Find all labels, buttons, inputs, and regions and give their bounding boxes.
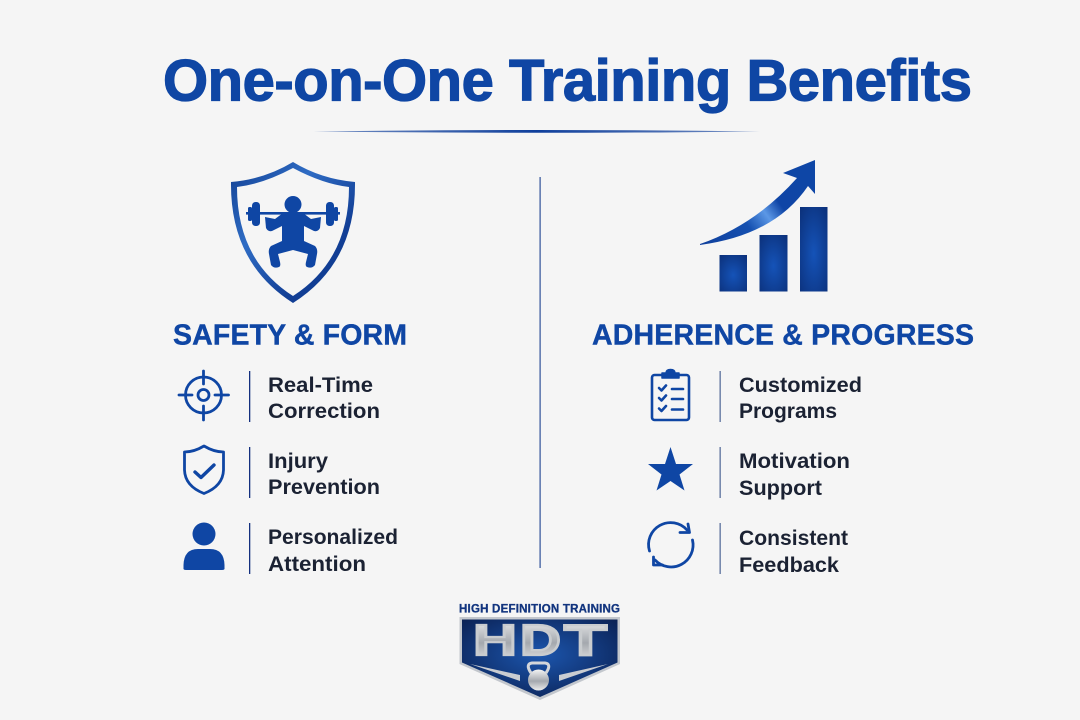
item: real-time correction: Correction: [268, 400, 380, 423]
item: injury prevention: Prevention: [268, 476, 380, 499]
icon: refresh arrows: [649, 523, 693, 567]
label: Personalized: [268, 526, 398, 549]
item: customized programs: Programs: [739, 400, 837, 423]
item: real-time correction: [179, 371, 380, 423]
panel: safety and form: [173, 162, 407, 576]
logo badge: [460, 617, 620, 700]
heading: safety and form: SAFETY & FORM: [173, 320, 407, 352]
icon: clipboard checklist: [652, 370, 689, 420]
label: Motivation: [739, 450, 850, 473]
icon: star: [648, 447, 693, 490]
heading: adherence and progress: ADHERENCE & PROGRESS: [592, 320, 974, 352]
logo letters: H: [473, 616, 517, 665]
center divider: [540, 177, 541, 568]
logo: HDT: [459, 604, 620, 700]
icon: shield with lifter: [231, 162, 355, 303]
label: Real-Time: [268, 374, 373, 397]
label: Customized: [739, 374, 862, 397]
item: motivation support: Support: [739, 477, 822, 500]
item: personalized attention: Attention: [268, 553, 366, 576]
icon: person: [183, 522, 225, 570]
logo tagline: HIGH DEFINITION TRAINING: [459, 604, 620, 616]
logo wings: [470, 664, 608, 681]
title: One-on-One Training Benefits: [163, 48, 972, 114]
item: consistent feedback: Feedback: [739, 554, 839, 577]
logo kettlebell: [528, 663, 549, 690]
item: injury prevention: [184, 446, 380, 499]
logo letters: D: [520, 616, 561, 665]
item: personalized attention: [183, 522, 398, 576]
item: customized programs: [652, 370, 862, 423]
icon: rising bar chart: [700, 160, 828, 292]
icon: check shield: [184, 446, 224, 494]
item: motivation support: [648, 447, 850, 500]
title underline: [313, 130, 760, 133]
logo letters: T: [564, 616, 607, 665]
label: Injury: [268, 450, 328, 473]
item: consistent feedback: [649, 523, 848, 577]
label: Consistent: [739, 527, 848, 550]
logo letters: [473, 616, 607, 665]
icon: target: [179, 371, 228, 420]
panel: adherence and progress: [592, 160, 974, 577]
